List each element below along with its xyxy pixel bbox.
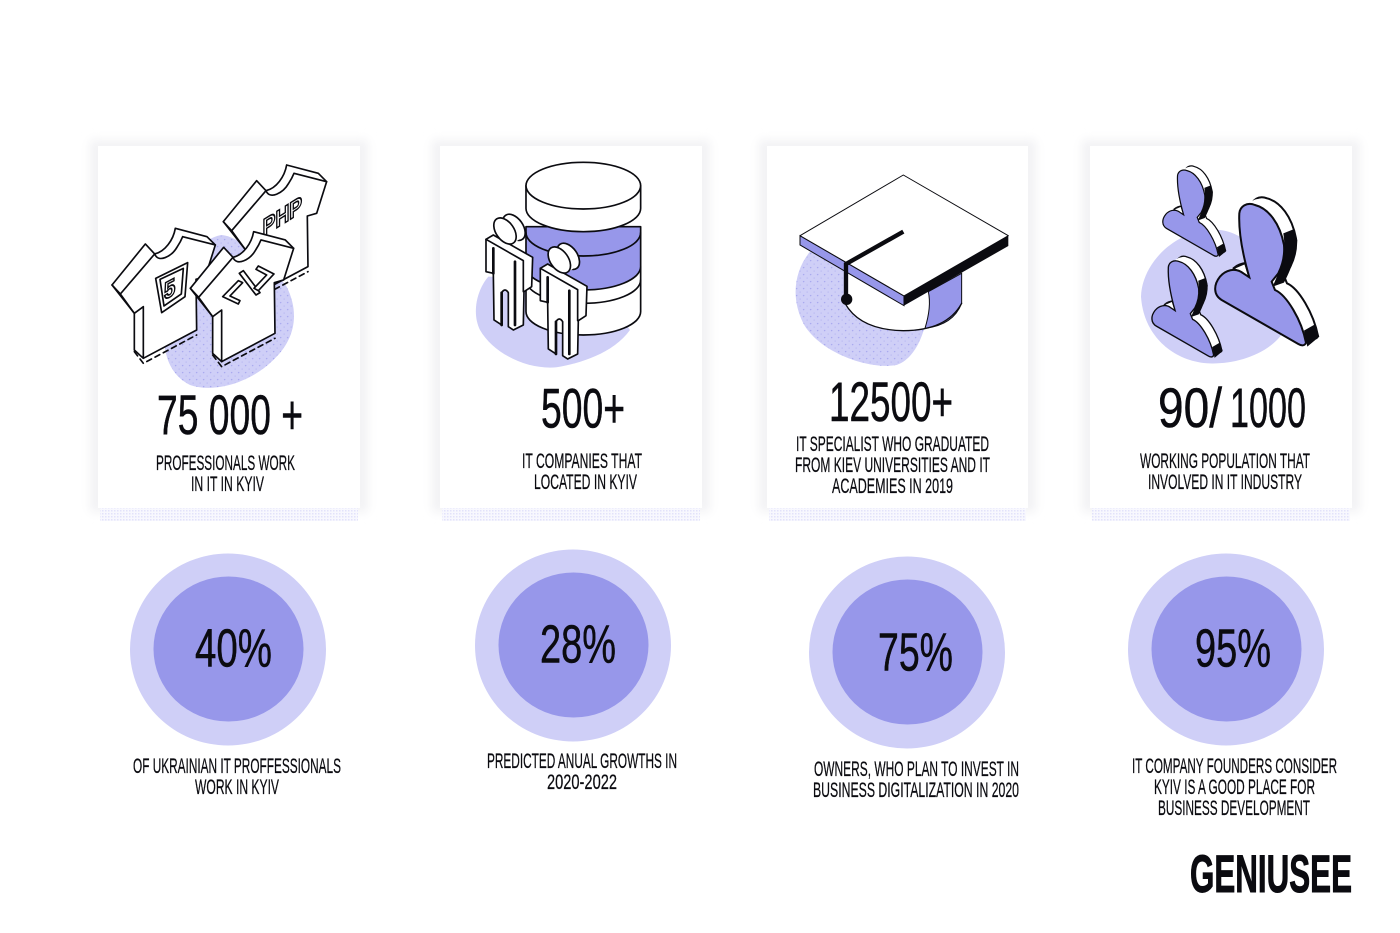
number: 90/1000: 90/: [1158, 376, 1222, 439]
caption: 40%: [133, 755, 341, 799]
panel: IT professionals: [90, 140, 368, 521]
number: 90/1000: [1158, 376, 1306, 439]
caption: 40%: OF UKRAINIAN IT PROFFESSIONALS: [133, 755, 341, 778]
icon: HTML5 shield: [156, 263, 188, 313]
stat: 28%: 28%: [540, 614, 616, 674]
stat: 40%: [130, 554, 326, 746]
blob: companies: [476, 277, 630, 368]
panel: IT companies: [432, 140, 710, 521]
blob: professionals: [164, 235, 294, 388]
caption: population: [1140, 450, 1310, 494]
caption: companies: LOCATED IN KYIV: [534, 471, 637, 494]
caption: graduates: FROM KIEV UNIVERSITIES AND IT: [795, 454, 990, 477]
icon: PHP shirt logo: PHP: [263, 190, 302, 242]
icon: HTML5 shield: 5: [164, 273, 175, 305]
number: 75 000 +: 75 000 +: [157, 383, 303, 446]
caption: 75%: BUSINESS DIGITALIZATION IN 2020: [813, 779, 1019, 802]
number: 12500+: 12500+: [829, 370, 953, 433]
panel: working population: [1082, 140, 1360, 521]
caption: 28%: PREDICTED ANUAL GROWTHS IN: [487, 750, 677, 773]
blob: population: [1141, 230, 1287, 363]
number: 500+: 500+: [541, 376, 625, 440]
caption: 95%: [1132, 755, 1337, 820]
stat: 75%: [809, 556, 1005, 748]
caption: professionals: [156, 452, 295, 496]
caption: companies: IT COMPANIES THAT: [522, 450, 642, 473]
caption: graduates: [795, 433, 990, 498]
stat: 40%: 40%: [195, 618, 272, 678]
number: 90/1000: 1000: [1230, 376, 1306, 439]
stat: 95%: [1128, 554, 1324, 746]
icon: three t-shirts with code logos: [112, 165, 327, 367]
caption: professionals: IN IT IN KYIV: [191, 473, 264, 496]
caption: graduates: IT SPECIALIST WHO GRADUATED: [796, 433, 989, 456]
caption: 40%: WORK IN KYIV: [195, 776, 279, 799]
caption: 75%: [813, 758, 1019, 802]
icon: database with two people: [486, 162, 641, 359]
stat: 75%: 75%: [878, 622, 953, 682]
icon: graduation cap: [800, 175, 1008, 331]
blob: graduates: [796, 252, 928, 366]
panel: graduates: [759, 140, 1036, 521]
caption: professionals: PROFESSIONALS WORK: [156, 452, 295, 475]
caption: companies: [522, 450, 642, 494]
stat: 95%: 95%: [1195, 618, 1271, 678]
icon: code brackets: [223, 266, 274, 304]
caption: 28%: [487, 750, 677, 794]
caption: graduates: ACADEMIES IN 2019: [832, 475, 953, 498]
database stack: [526, 162, 641, 335]
caption: 75%: OWNERS, WHO PLAN TO INVEST IN: [814, 758, 1019, 781]
caption: 28%: 2020-2022: [547, 771, 617, 794]
icon: three user busts: [1152, 166, 1319, 358]
stat: 28%: [475, 550, 671, 742]
